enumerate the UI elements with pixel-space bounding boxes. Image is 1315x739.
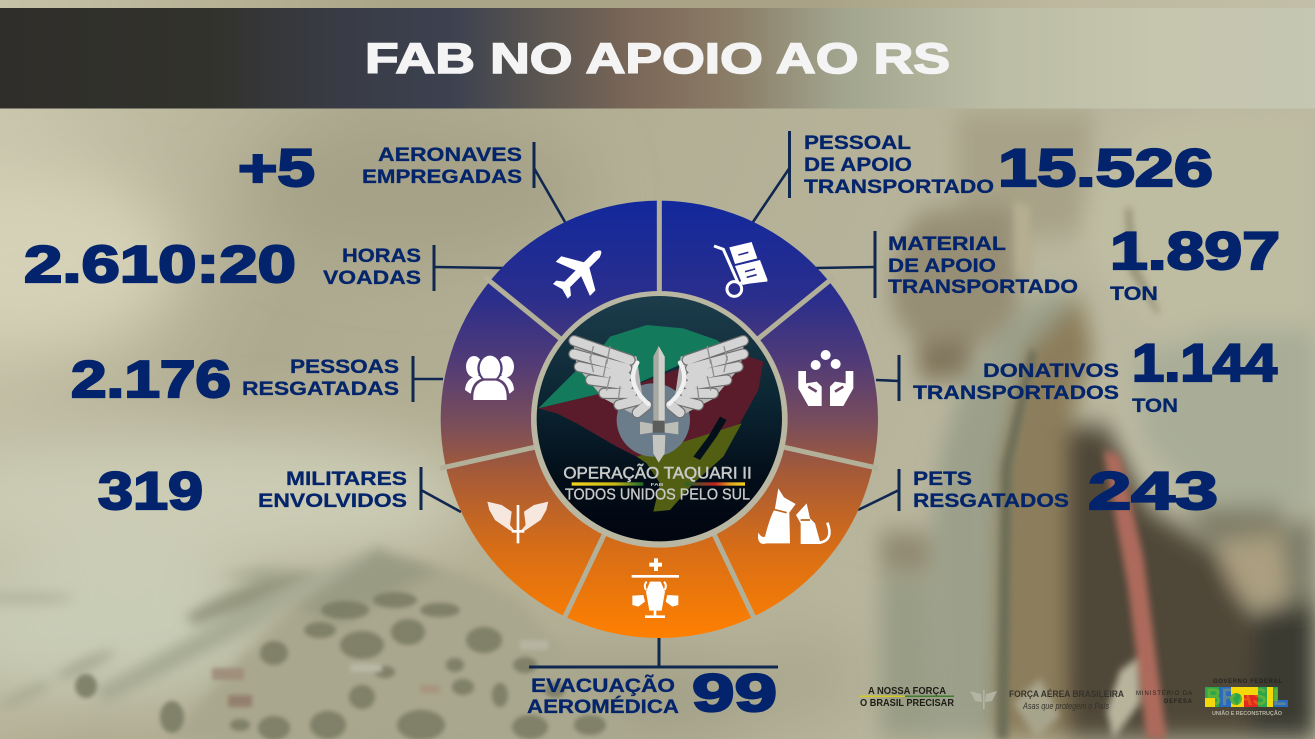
stat: pets resgatados: PETS xyxy=(913,469,972,490)
government of Brazil logo: BRASIL xyxy=(1206,684,1286,711)
slogan logo xyxy=(860,686,955,709)
title: FAB NO APOIO AO RS xyxy=(365,35,950,83)
icon: people xyxy=(465,354,514,400)
stat: pessoal de apoio transportado: DE APOIO xyxy=(804,155,912,176)
icon: hands and donations xyxy=(798,350,853,406)
stat: material de apoio transportado: TRANSPORTADO xyxy=(888,277,1078,298)
footer logos xyxy=(860,679,1288,717)
air force name: Asas que protegem o País xyxy=(1022,701,1109,711)
flood scene xyxy=(0,545,640,739)
stat: militares envolvidos: 319 xyxy=(98,462,203,521)
stat: pessoal de apoio transportado: 15.526 xyxy=(998,139,1213,198)
icon: airplane xyxy=(543,234,618,308)
government of Brazil logo: GOVERNO FEDERAL xyxy=(1213,679,1282,685)
stat: evacuacao aeromedica xyxy=(527,636,778,723)
stat: evacuacao aeromedica: 99 xyxy=(692,664,777,723)
helicopter crew scene, drawn in crop coordinates xyxy=(880,110,1315,739)
stat: pets resgatados xyxy=(858,462,1218,521)
emblem text: FAB xyxy=(651,482,663,487)
ministry name: MINISTÉRIO DA xyxy=(1136,690,1192,697)
stat: donativos transportados: TON xyxy=(1132,396,1178,417)
stat: donativos transportados: DONATIVOS xyxy=(983,361,1119,382)
stat: evacuacao aeromedica: EVACUAÇÃO xyxy=(531,675,675,697)
wheel diagram xyxy=(440,197,878,638)
government of Brazil logo: UNIÃO E RECONSTRUÇÃO xyxy=(1212,710,1283,717)
stat: militares envolvidos: ENVOLVIDOS xyxy=(258,491,407,512)
stat: pets resgatados: RESGATADOS xyxy=(913,491,1069,512)
government of Brazil logo xyxy=(1205,679,1288,717)
stat: aeronaves empregadas: AERONAVES xyxy=(378,145,522,166)
icon: hand truck with boxes xyxy=(714,242,767,296)
stat: material de apoio transportado: 1.897 xyxy=(1110,222,1280,281)
stat: pessoas resgatadas: RESGATADAS xyxy=(242,379,399,400)
stat: horas voadas: 2.610:20 xyxy=(24,236,296,294)
slogan logo: A NOSSA FORÇA xyxy=(868,686,946,697)
center emblem disc xyxy=(531,291,788,548)
stat: donativos transportados xyxy=(876,334,1278,417)
icon: small wings emblem xyxy=(970,690,997,709)
ministry name: DEFESA xyxy=(1164,699,1193,705)
icon: medical helicopter xyxy=(632,558,679,617)
stat: pessoas resgatadas: 2.176 xyxy=(71,351,231,409)
icon: dog and cat xyxy=(758,488,829,544)
top strip xyxy=(0,0,1315,8)
stat: horas voadas: VOADAS xyxy=(323,268,421,289)
stat: material de apoio transportado xyxy=(816,222,1280,305)
ministry name xyxy=(1136,690,1193,705)
stat: horas voadas: HORAS xyxy=(342,246,421,267)
stat: pets resgatados: 243 xyxy=(1088,462,1218,521)
stat: horas voadas xyxy=(24,236,503,294)
stat: militares envolvidos: MILITARES xyxy=(286,469,407,490)
title banner xyxy=(0,8,1315,108)
winged sword xyxy=(573,338,745,463)
icon: air force wings badge xyxy=(487,502,548,543)
stat: material de apoio transportado: MATERIAL xyxy=(888,234,1006,255)
slogan logo: O BRASIL PRECISAR xyxy=(860,698,955,709)
stat: aeronaves empregadas xyxy=(238,139,565,222)
stat: pessoal de apoio transportado xyxy=(753,131,1213,222)
stat: donativos transportados: 1.144 xyxy=(1132,334,1278,393)
emblem text: TODOS UNIDOS PELO SUL xyxy=(565,486,750,503)
air force name: FORÇA AÉREA BRASILEIRA xyxy=(1009,689,1124,700)
stat: evacuacao aeromedica: AEROMÉDICA xyxy=(527,696,679,718)
wheel ring with seven segments xyxy=(440,197,878,638)
stat: material de apoio transportado: DE APOIO xyxy=(888,256,996,277)
state map xyxy=(538,325,763,512)
stat: material de apoio transportado: TON xyxy=(1110,284,1158,305)
emblem text xyxy=(563,462,752,503)
stat: donativos transportados: TRANSPORTADOS xyxy=(913,383,1119,404)
stat: aeronaves empregadas: EMPREGADAS xyxy=(362,167,522,188)
stat: militares envolvidos xyxy=(98,462,461,521)
stat: pessoas resgatadas: PESSOAS xyxy=(290,357,399,378)
air force name xyxy=(1009,689,1124,711)
stat: pessoal de apoio transportado: TRANSPORTADO xyxy=(804,177,994,198)
emblem text: OPERAÇÃO TAQUARI II xyxy=(563,462,752,482)
stat: pessoas resgatadas xyxy=(71,351,443,409)
stat: aeronaves empregadas: +5 xyxy=(238,139,315,198)
stat: pessoal de apoio transportado: PESSOAL xyxy=(804,133,911,154)
